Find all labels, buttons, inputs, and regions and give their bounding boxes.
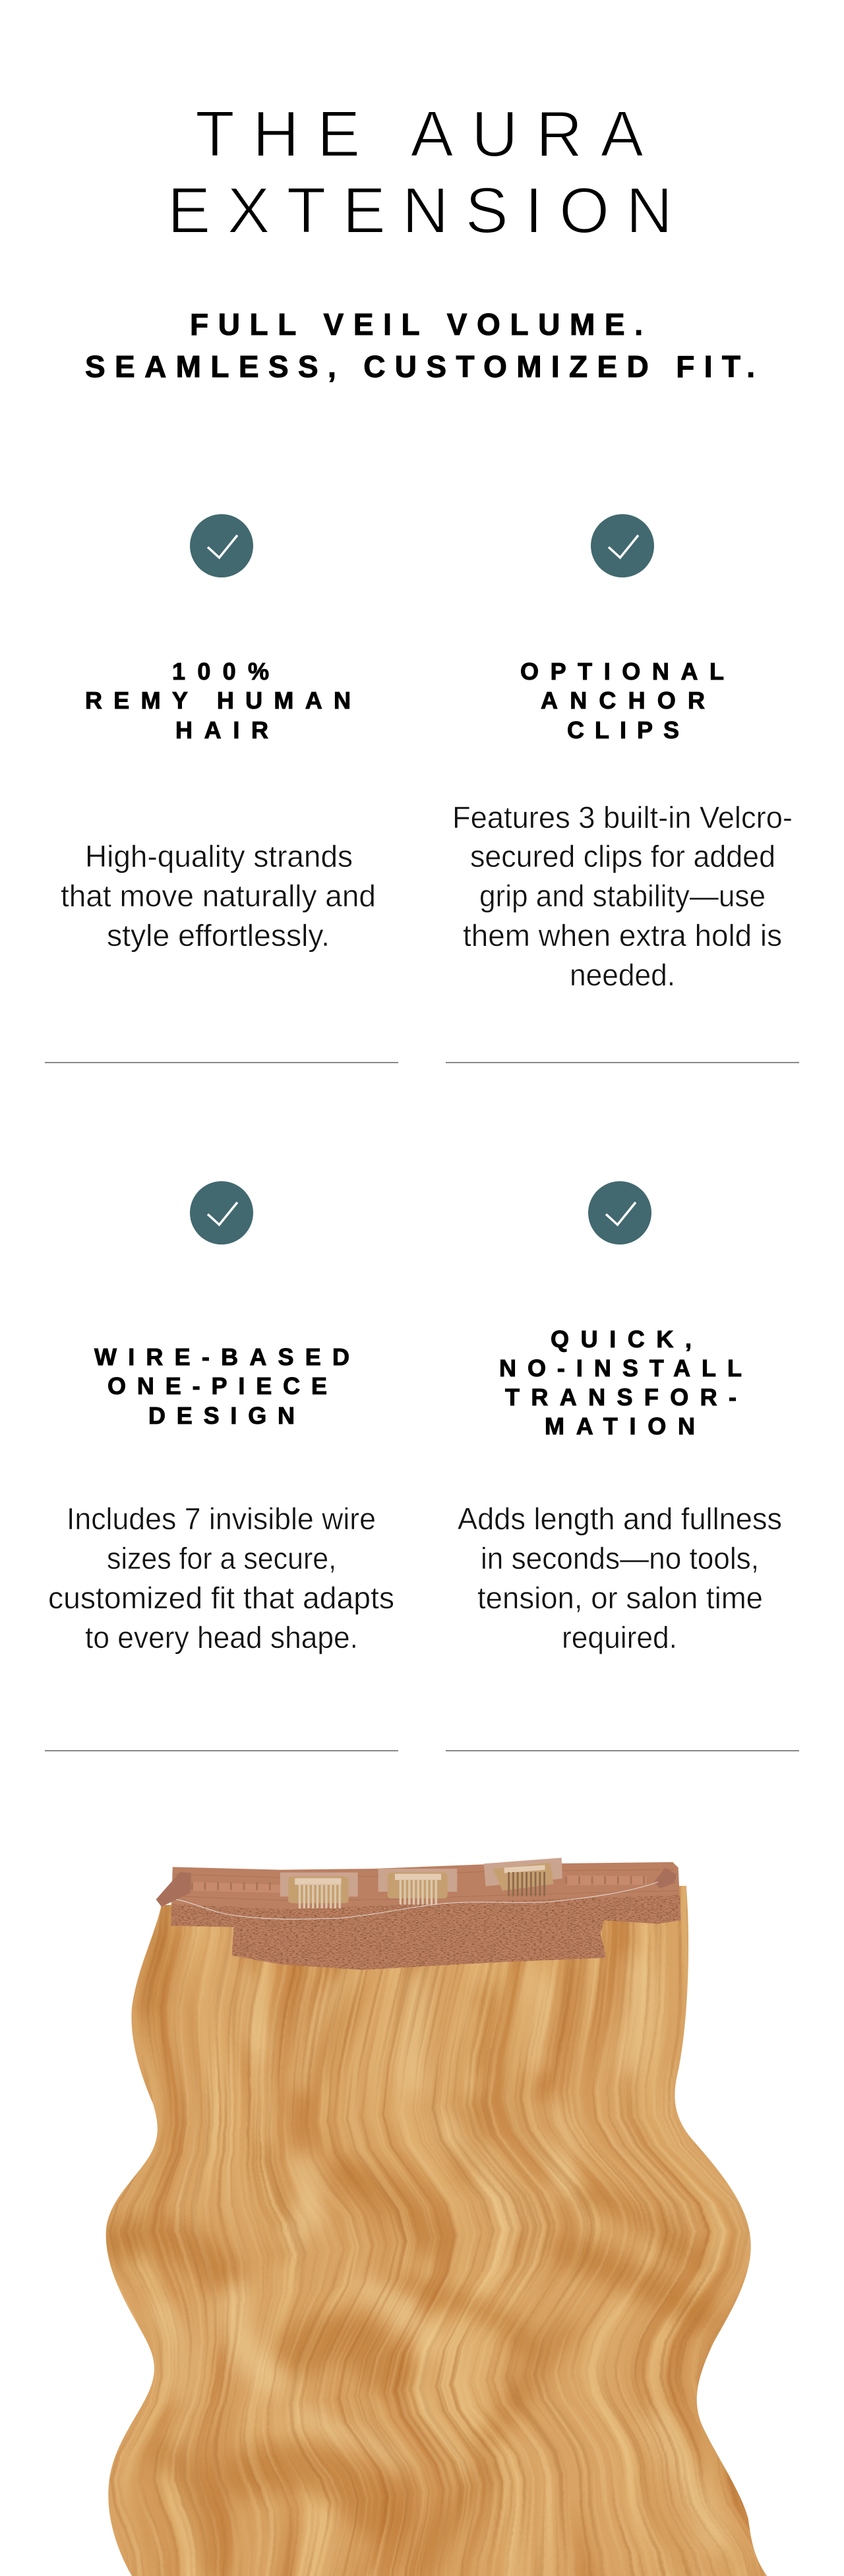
- icon: check badge: [190, 514, 253, 577]
- text: anchor clips description: them when extra hold is: [463, 918, 782, 952]
- title: [167, 98, 673, 247]
- heading: quick no-install transformation: [499, 1326, 742, 1440]
- hair body: [80, 1861, 781, 2576]
- subtitle: [85, 307, 755, 384]
- heading: optional anchor clips: CLIPS: [567, 717, 679, 744]
- elastic strips: [156, 1867, 677, 1907]
- weft band with lace, clips and wire: [156, 1858, 688, 1973]
- icon: check badge: [588, 1181, 651, 1244]
- text: wire description: to every head shape.: [85, 1620, 358, 1654]
- heading: optional anchor clips: [520, 658, 724, 744]
- heading: wire-based one-piece design: ONE-PIECE: [107, 1372, 327, 1399]
- heading: quick no-install transformation: QUICK,: [551, 1326, 692, 1353]
- icon: check badge: [190, 1181, 253, 1244]
- text: wire description: Includes 7 invisible wire: [67, 1502, 376, 1536]
- text: quick install description: required.: [562, 1620, 677, 1654]
- heading: quick no-install transformation: MATION: [545, 1413, 695, 1440]
- text: anchor clips description: needed.: [570, 958, 675, 992]
- text: anchor clips description: [452, 800, 793, 992]
- panel: quick no-install transformation: [458, 1181, 782, 1654]
- heading: wire-based one-piece design: DESIGN: [148, 1402, 295, 1429]
- subtitle: SEAMLESS, CUSTOMIZED FIT.: [85, 349, 755, 384]
- text: wire description: [48, 1502, 394, 1654]
- text: anchor clips description: grip and stability—use: [479, 879, 766, 913]
- text: remy hair description: that move naturally and: [61, 879, 376, 913]
- heading: wire-based one-piece design: WIRE-BASED: [94, 1343, 349, 1370]
- text: remy hair description: [61, 839, 376, 952]
- text: anchor clips description: Features 3 built-in Velcro-: [452, 800, 793, 834]
- text: quick install description: [458, 1502, 782, 1654]
- panel: 100% remy human hair: [61, 514, 376, 952]
- heading: quick no-install transformation: NO-INSTALL: [499, 1355, 742, 1382]
- product image: wavy hair extension: [80, 1858, 781, 2576]
- heading: 100% remy human hair: [85, 658, 351, 744]
- lace band: [171, 1862, 681, 1970]
- title: THE AURA: [195, 98, 644, 170]
- clip 3: [484, 1858, 562, 1890]
- panel: optional anchor clips: [452, 514, 793, 992]
- heading: 100% remy human hair: HAIR: [175, 717, 268, 744]
- text: quick install description: tension, or salon time: [477, 1581, 763, 1615]
- heading: 100% remy human hair: REMY HUMAN: [85, 687, 351, 714]
- title: EXTENSION: [167, 174, 673, 247]
- panel: wire-based one-piece design: [48, 1181, 394, 1654]
- heading: quick no-install transformation: TRANSFOR-: [505, 1384, 737, 1411]
- text: wire description: customized fit that adapts: [48, 1581, 394, 1615]
- heading: 100% remy human hair: 100%: [172, 658, 269, 685]
- band ribbing: [173, 1869, 679, 1915]
- icon: check badge: [591, 514, 654, 577]
- subtitle: FULL VEIL VOLUME.: [190, 307, 643, 341]
- text: remy hair description: High-quality strands: [85, 839, 353, 873]
- heading: wire-based one-piece design: [94, 1343, 349, 1429]
- clip 2: [378, 1869, 457, 1898]
- text: remy hair description: style effortlessly.: [107, 918, 330, 952]
- text: anchor clips description: secured clips for added: [470, 839, 775, 873]
- text: quick install description: Adds length and fullness: [458, 1502, 782, 1536]
- clip 1: [280, 1873, 358, 1903]
- text: wire description: sizes for a secure,: [107, 1541, 336, 1575]
- heading: optional anchor clips: ANCHOR: [541, 687, 705, 714]
- text: quick install description: in seconds—no tools,: [481, 1541, 759, 1575]
- wire: [176, 1882, 658, 1919]
- heading: optional anchor clips: OPTIONAL: [520, 658, 724, 685]
